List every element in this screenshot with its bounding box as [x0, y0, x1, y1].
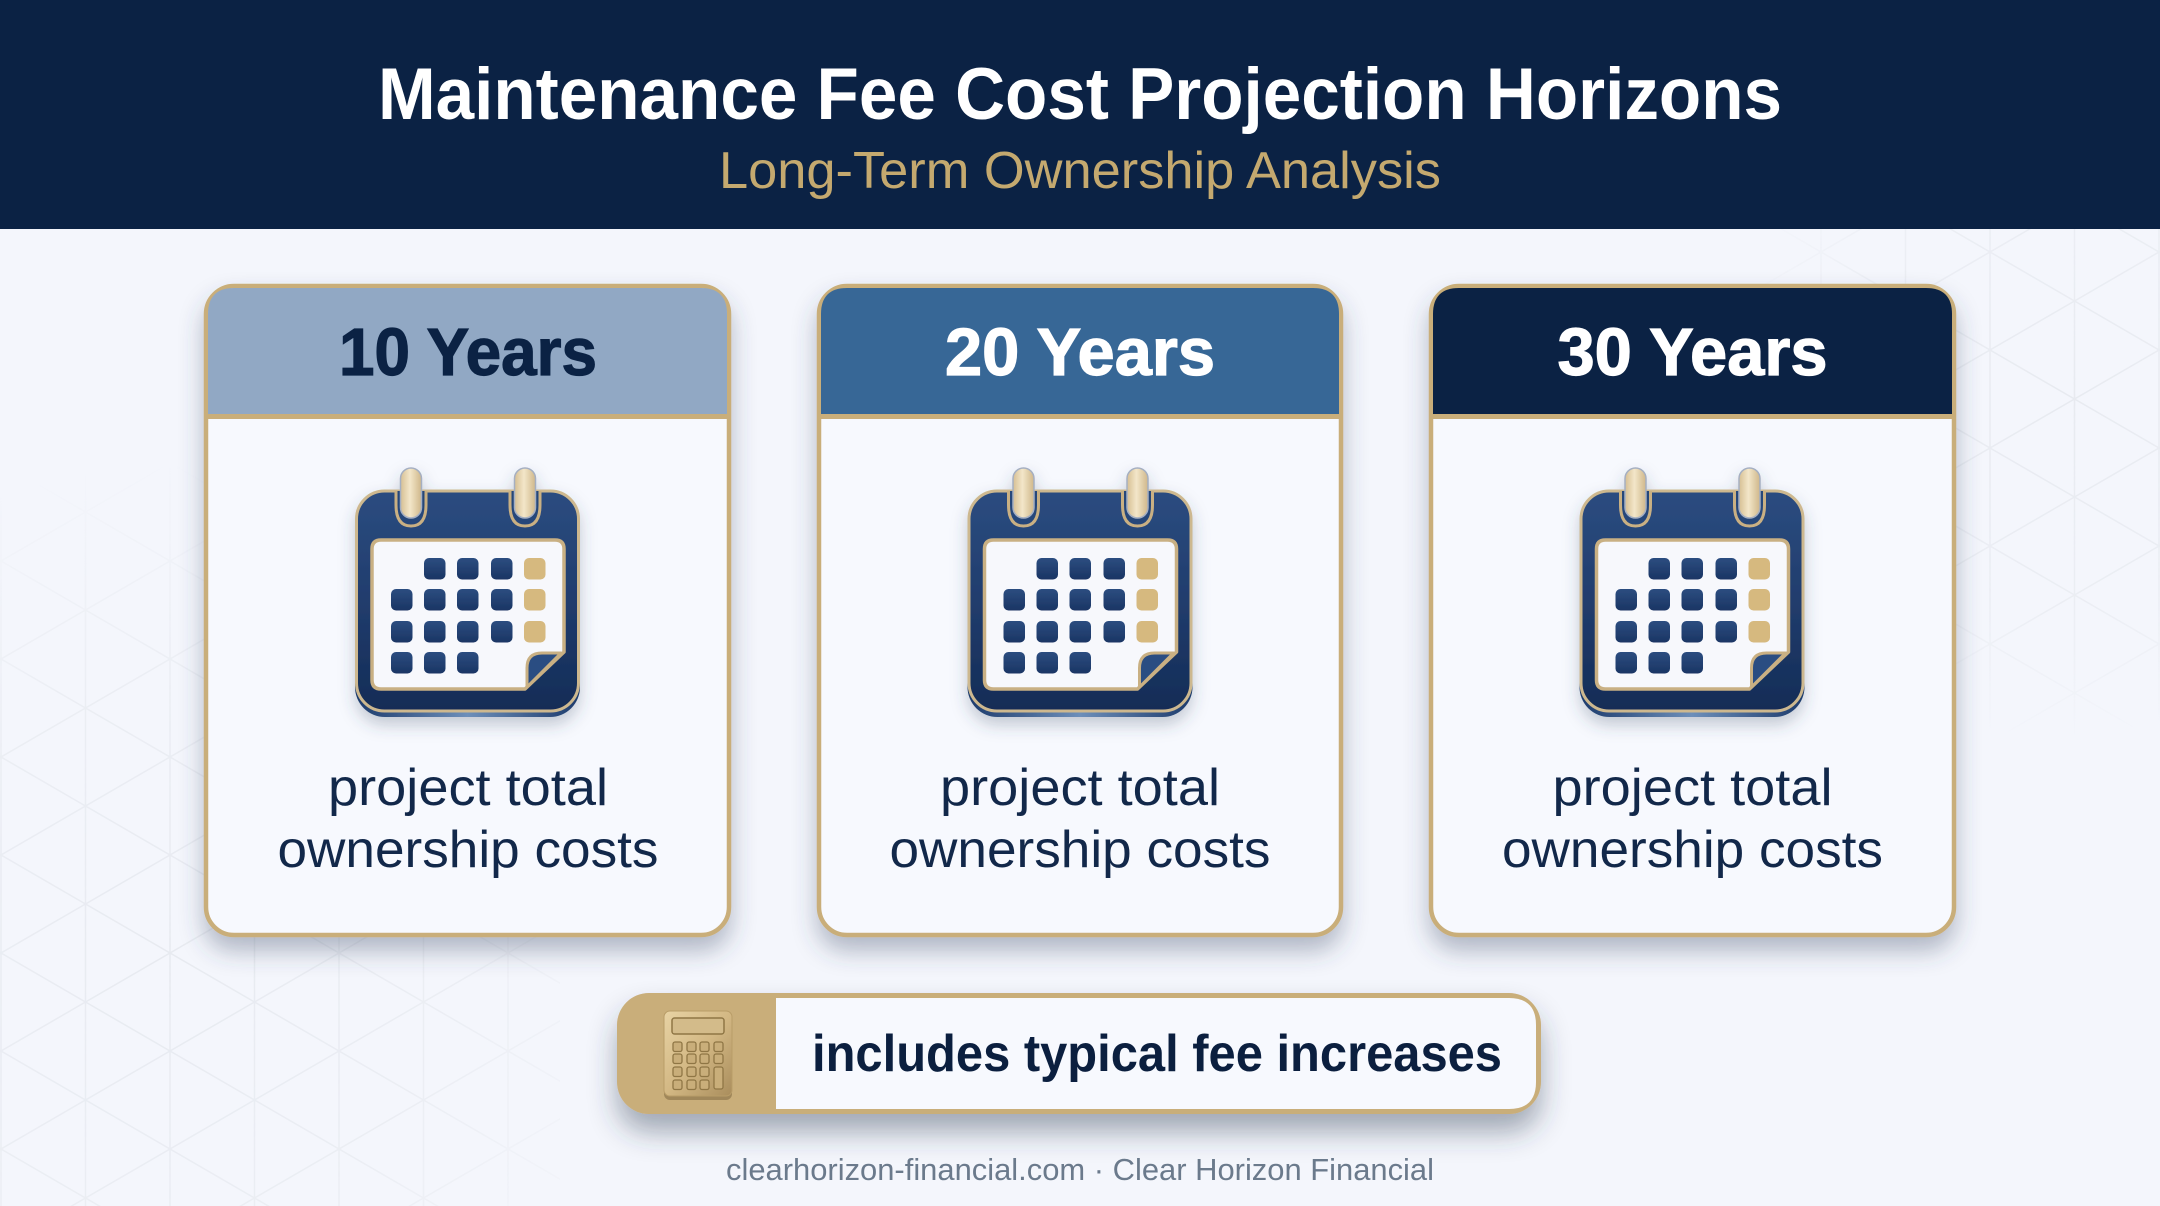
- card text: project total: [1552, 759, 1832, 817]
- card text: ownership costs: [890, 821, 1270, 879]
- card text: ownership costs: [278, 821, 658, 879]
- callout: includes typical fee increases: [617, 993, 1541, 1114]
- icon: calendar: [968, 468, 1192, 717]
- panel: 20 years: [819, 286, 1341, 935]
- icon: calendar: [355, 468, 580, 717]
- subtitle: Long-Term Ownership Analysis: [719, 142, 1441, 200]
- footer source line: clearhorizon-financial.com · Clear Horizon Financial: [726, 1152, 1434, 1187]
- callout text: includes typical fee increases: [812, 1025, 1502, 1083]
- panel header: 20 years: [819, 288, 1341, 419]
- card text: [1502, 759, 1883, 879]
- card text: [278, 759, 658, 879]
- panel header: 10 years: 10 Years: [339, 315, 597, 390]
- panel header: 30 years: [1431, 288, 1954, 419]
- card text: project total: [328, 759, 608, 817]
- panel header: 20 years: 20 Years: [945, 315, 1215, 390]
- panel: 10 years: [206, 286, 729, 935]
- panel: 30 years: [1431, 286, 1954, 935]
- icon: calendar: [1580, 468, 1804, 717]
- panel header: 10 years: [206, 288, 729, 419]
- icon: calculator: [664, 1011, 732, 1100]
- header banner: [0, 0, 2160, 229]
- panel header: 30 years: 30 Years: [1558, 315, 1828, 390]
- title: Maintenance Fee Cost Projection Horizons: [378, 54, 1782, 135]
- card text: ownership costs: [1502, 821, 1883, 879]
- card text: project total: [940, 759, 1220, 817]
- card text: [890, 759, 1270, 879]
